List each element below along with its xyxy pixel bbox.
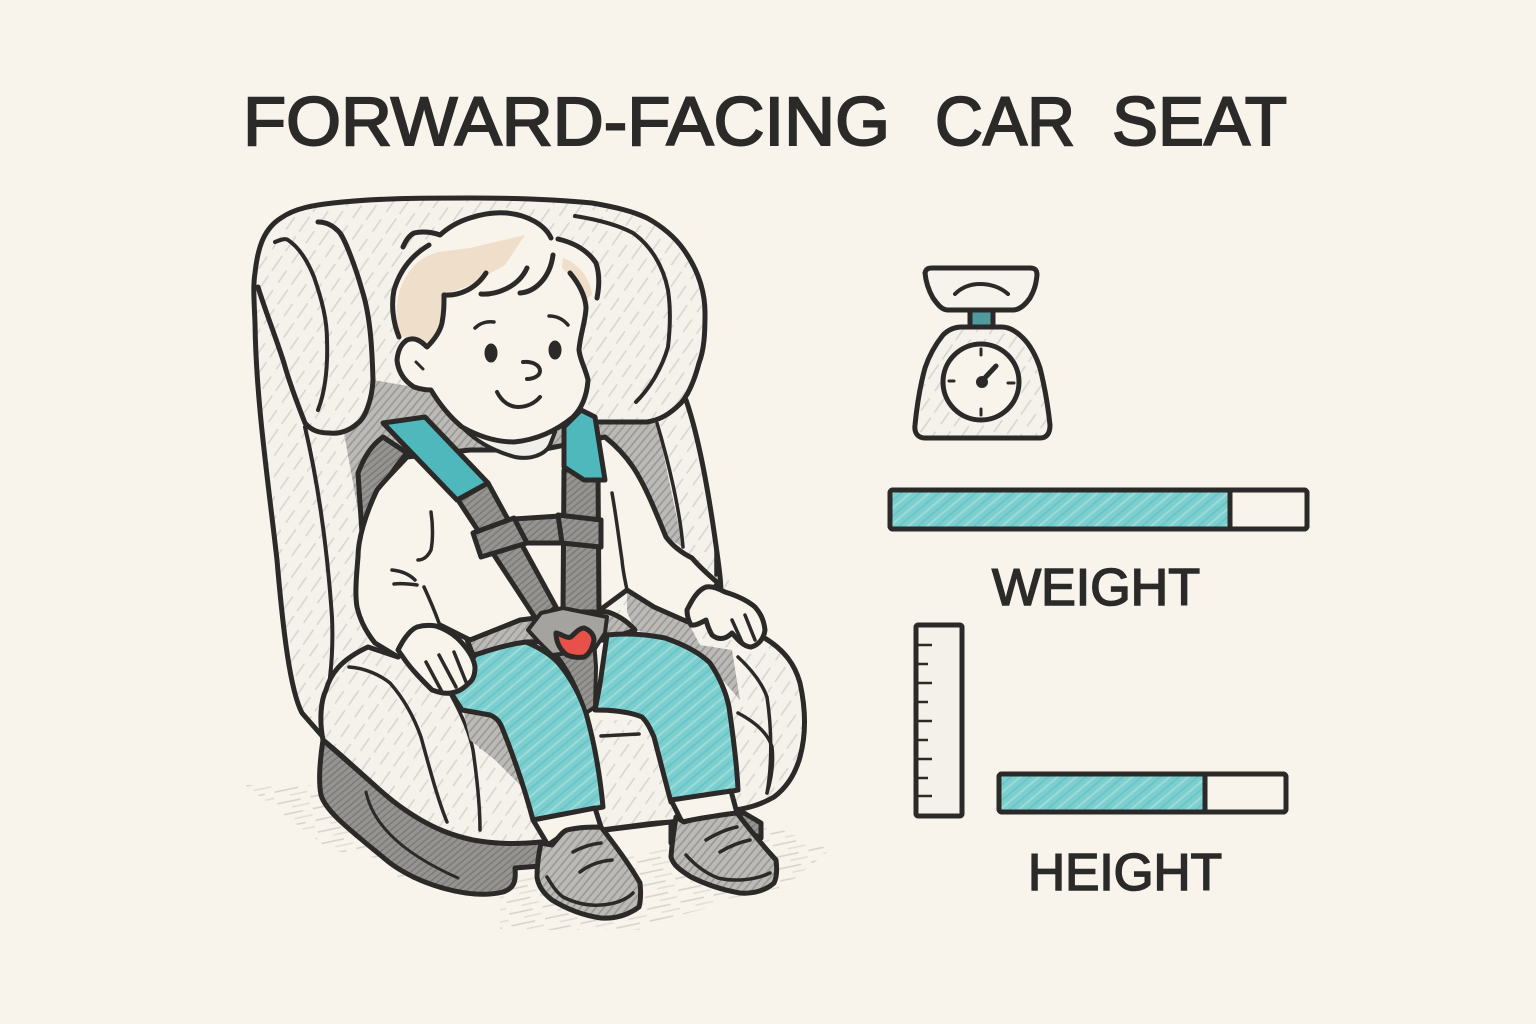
height icon: ruler xyxy=(916,625,962,816)
ruler ticks xyxy=(918,645,932,796)
seat base inner line xyxy=(366,792,458,878)
height progress bar xyxy=(999,774,1286,812)
cushion right outline xyxy=(736,637,804,810)
height label: HEIGHT xyxy=(1028,844,1222,902)
left hand fingers xyxy=(426,652,466,690)
title: SEAT xyxy=(1112,83,1287,160)
floor shadow xyxy=(245,785,830,930)
weight label: WEIGHT xyxy=(992,559,1200,617)
lap belt xyxy=(466,608,635,655)
height bar frame xyxy=(999,774,1286,812)
crotch strap xyxy=(552,640,596,713)
needle hub xyxy=(976,376,988,388)
face and ear outline xyxy=(397,273,588,442)
headrest left inner curve xyxy=(275,239,327,410)
height bar fill xyxy=(1001,776,1205,810)
seat back left outer line xyxy=(255,323,323,737)
scale pan arc xyxy=(955,284,1008,294)
left harness strap xyxy=(458,483,556,622)
chest clip right xyxy=(558,515,601,547)
illustration: child in car seat xyxy=(245,198,830,930)
chest clip left xyxy=(473,518,527,557)
seat back shell xyxy=(255,273,760,737)
scale body xyxy=(915,327,1050,438)
left sock xyxy=(533,808,601,845)
left shoe xyxy=(537,827,641,918)
right hand fingers xyxy=(732,615,755,642)
headrest outline xyxy=(258,222,373,433)
left hand xyxy=(398,625,475,693)
shading behind head xyxy=(344,310,683,547)
seat cushion xyxy=(321,637,804,843)
ear detail xyxy=(416,362,423,369)
seat right inner line xyxy=(657,423,683,547)
sweater details xyxy=(392,493,716,623)
shading under right arm xyxy=(627,592,740,700)
right sock xyxy=(671,791,737,822)
left shoulder pad xyxy=(383,417,488,500)
right leg xyxy=(595,634,738,802)
collar xyxy=(462,427,555,458)
scale pan xyxy=(925,268,1037,310)
weight bar frame xyxy=(890,490,1307,529)
weight progress bar xyxy=(890,490,1307,529)
left shoe details xyxy=(547,843,633,905)
smile xyxy=(497,392,540,407)
hair and head fill xyxy=(393,213,599,442)
dial ticks xyxy=(949,349,1014,415)
hair outlines xyxy=(393,213,599,337)
scale neck xyxy=(970,310,993,328)
horizontal chest strap xyxy=(514,516,601,547)
title xyxy=(243,83,1287,160)
eyes xyxy=(484,340,562,362)
seat base xyxy=(320,740,761,894)
hair tint xyxy=(397,235,525,347)
title: CAR xyxy=(935,83,1075,160)
weight bar divider xyxy=(1228,490,1232,529)
seat back inner line xyxy=(305,427,332,677)
child torso and sweater xyxy=(356,437,718,657)
right shoulder pad xyxy=(564,410,605,480)
side wing dark strap xyxy=(358,437,407,533)
right harness strap xyxy=(563,470,599,612)
headrest xyxy=(255,198,705,433)
seat side outer lines xyxy=(686,400,721,600)
height bar divider xyxy=(1202,774,1208,812)
right shoe details xyxy=(686,827,770,880)
scale dial xyxy=(943,344,1019,420)
cushion inner lines xyxy=(349,657,773,830)
right shoe xyxy=(671,813,777,893)
brows xyxy=(475,316,568,328)
headrest right inner curve xyxy=(575,216,670,402)
nose xyxy=(523,362,540,379)
shading under left leg xyxy=(462,705,525,790)
hair tint right xyxy=(562,258,592,300)
buckle housing xyxy=(528,608,607,655)
weight icon: kitchen scale xyxy=(915,268,1050,438)
red buckle xyxy=(556,628,594,657)
cushion left outline xyxy=(321,647,541,843)
headrest outer outline xyxy=(254,198,705,422)
weight bar fill xyxy=(892,492,1230,527)
title: FORWARD-FACING xyxy=(243,83,890,160)
left leg xyxy=(451,642,603,820)
right hand xyxy=(687,587,765,647)
dial needle xyxy=(981,366,996,382)
